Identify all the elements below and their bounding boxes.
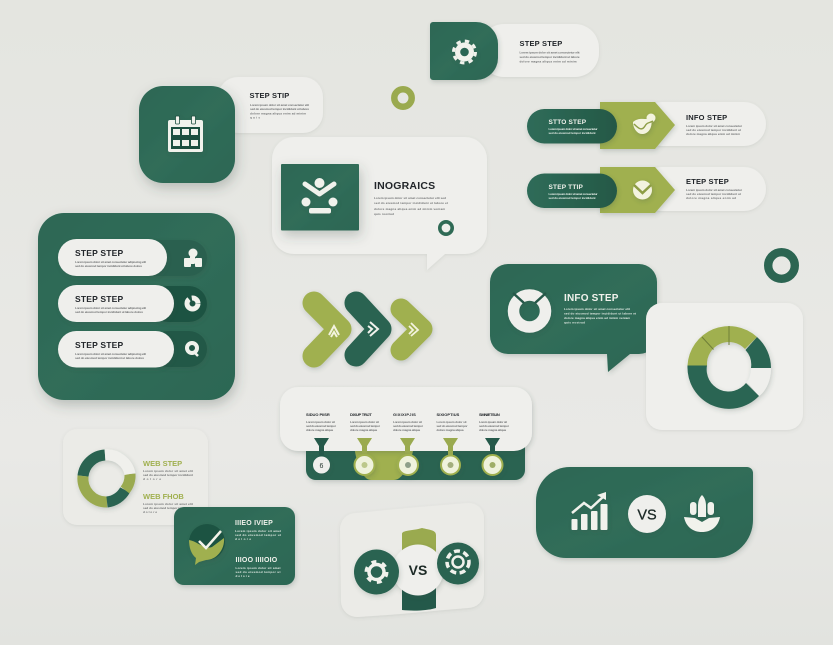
- calendar text card: [218, 77, 323, 133]
- column 5: dolore magna aliqua: [479, 428, 506, 432]
- column 2: Lorem ipsum dolor sit: [350, 420, 379, 424]
- panel: gear step: sed do eiusmod tempor incididunt ut labore: [520, 55, 580, 59]
- panel: arrow step row 1: [527, 102, 766, 149]
- panel: small donut card: dolore: [143, 477, 161, 481]
- list row 3: [58, 331, 207, 368]
- body text: sed do eiusmod tempor incididunt ut labore et: [374, 201, 448, 205]
- list row 3: sed do eiusmod tempor incididunt ut labore dolore: [75, 356, 144, 360]
- panel: arrow step row 2: dolore magna aliqua enim ad: [686, 196, 736, 200]
- panel: arrow step row 1: Lorem ipsum dolor sit amet consectetur: [686, 124, 743, 128]
- calendar text card: Lorem ipsum dolor sit amet consectetur elit: [250, 103, 309, 107]
- icon: search: [187, 343, 198, 356]
- column 2: dolore magna aliqua: [350, 428, 377, 432]
- list row 1: [58, 239, 207, 276]
- panel: arrow step row 2: ETEP STEP: [686, 177, 729, 186]
- panel: arrow step row 2: sed do eiusmod tempor incididunt ut: [686, 192, 741, 196]
- column 1: 6: [320, 463, 324, 470]
- panel: small green card: IIIEO IVIEP: [235, 520, 273, 527]
- panel: small green card: Lorem ipsum dolor sit amet: [235, 529, 281, 533]
- panel: arrow step row 2: STEP TTIP: [548, 184, 584, 191]
- icon: pie: [187, 298, 198, 309]
- panel: speech card infographics: [272, 137, 487, 270]
- panel: small green card: sed do eiusmod tempor ut: [235, 533, 281, 537]
- calendar text card: dolore magna aliqua enim ad minim: [250, 112, 306, 116]
- heading: INOGRAICS: [374, 180, 435, 192]
- body text: [374, 196, 448, 216]
- calendar text card: quis: [250, 116, 260, 120]
- icon: growth chart: [572, 492, 608, 530]
- column 3: Lorem ipsum dolor sit: [393, 420, 422, 424]
- dark tab: [402, 585, 436, 611]
- panel: arrow step row 2: Lorem ipsum dolor sit amet consectetur: [548, 192, 598, 196]
- column 5: SMNIETSUN: [479, 412, 500, 417]
- panel: arrow step row 1: dolore magna aliqua enim ad minim: [686, 132, 740, 136]
- column 2: sed do eiusmod tempor: [350, 424, 381, 428]
- panel: small donut card: WEB FHOB: [143, 492, 184, 501]
- panel: five column timeline: [280, 387, 532, 480]
- body text: quis nostrud: [374, 212, 394, 216]
- chevron 3: [401, 309, 422, 350]
- panel: green speech bubble: Lorem ipsum dolor sit amet consectetur elit: [564, 307, 630, 311]
- panel: small donut card: [63, 429, 208, 525]
- VS badge: VS: [637, 508, 657, 524]
- panel: small donut card: dolore: [143, 510, 157, 514]
- column 2: DIXUP TRIJT: [350, 412, 372, 417]
- icon: ring segments: [513, 293, 546, 327]
- panel: green speech bubble: dolore magna aliqua enim ad minim veniam: [564, 316, 630, 320]
- panel: arrow step row 1: sed do eiusmod tempor incididunt ut: [686, 128, 741, 132]
- panel: gear step: [430, 22, 599, 80]
- calendar text card: STEP STIP: [250, 91, 290, 100]
- list row 3: STEP STEP: [75, 340, 124, 350]
- panel: small donut card: sed do eiusmod tempor incididunt: [143, 506, 193, 510]
- column 1: SIDUO PIISR: [306, 412, 330, 417]
- chevron 2: [356, 303, 380, 355]
- panel: small green card: IIIOO IIIIOIO: [236, 557, 278, 564]
- body text: Lorem ipsum dolor sit amet consectetur elit sed: [374, 196, 446, 200]
- column 5: Lorem ipsum dolor sit: [479, 420, 507, 424]
- column 3: [393, 412, 424, 475]
- column 3: dolore magna aliqua: [393, 428, 420, 432]
- body text: dolore magna aliqua enim ad minim veniam: [374, 207, 445, 211]
- panel: small donut card: sed do eiusmod tempor incididunt: [143, 473, 193, 477]
- panel: calendar step: [139, 77, 323, 183]
- column 4: Lorem ipsum dolor sit: [436, 420, 466, 424]
- icon: leaf: [633, 114, 656, 134]
- timeline card: [280, 387, 532, 451]
- icon: people node: [184, 248, 202, 267]
- panel: arrow step row 1: Lorem ipsum dolor sit amet consectetur: [548, 127, 598, 131]
- icon: speech check: [189, 524, 225, 565]
- flower circle: [437, 542, 479, 584]
- panel: VS pill: [536, 467, 753, 558]
- icon: gear: [454, 41, 476, 63]
- panel: arrow step row 1: INFO STEP: [686, 113, 727, 122]
- panel: green speech bubble: INFO STEP: [564, 293, 619, 304]
- calendar text card: sed do eiusmod tempor incididunt ut labore: [250, 107, 309, 111]
- list row 2: sed do eiusmod tempor incididunt ut labore dolore: [75, 310, 143, 314]
- panel: VS comparison card: [340, 503, 484, 617]
- chevron 1: [314, 303, 340, 356]
- column 4: SIXIOPTIUS: [436, 412, 460, 417]
- panel: small green card: dolore: [235, 537, 251, 541]
- icon: check shield: [633, 180, 652, 200]
- panel: arrow step row 2: Lorem ipsum dolor sit amet consectetur: [686, 188, 743, 192]
- panel: arrow step row 1: sed do eiusmod tempor incididunt: [548, 131, 596, 135]
- list row 3: Lorem ipsum dolor sit amet consectetur adipiscing elit: [75, 352, 146, 356]
- gear circle: [354, 550, 399, 594]
- ring: large dark: [768, 252, 795, 279]
- list row 1: Lorem ipsum dolor sit amet consectetur adipiscing elit: [75, 260, 146, 264]
- green icon square: [281, 164, 359, 230]
- VS circle: VS: [409, 562, 427, 578]
- column 1: dolore magna aliqua: [306, 428, 333, 432]
- panel: small green card: Lorem ipsum dolor sit amet: [236, 566, 280, 570]
- column 4: sed do eiusmod tempor: [436, 424, 468, 428]
- calendar tile: [139, 86, 235, 183]
- panel: donut chart card: [646, 303, 803, 430]
- panel: small donut card: Lorem ipsum dolor sit amet elit: [143, 469, 193, 473]
- ring: olive: [394, 89, 412, 107]
- donut chart: [687, 326, 771, 409]
- column 1: [306, 412, 337, 474]
- panel: three step list: [38, 213, 235, 400]
- panel: small donut card: Lorem ipsum dolor sit amet elit: [143, 502, 193, 506]
- icon: lotus: [684, 495, 720, 532]
- icon: people: [302, 178, 338, 214]
- column 1: sed do eiusmod tempor: [306, 424, 337, 428]
- panel: green speech bubble: sed do eiusmod tempor incididunt ut labore et: [564, 312, 636, 316]
- column 4: [436, 412, 468, 474]
- list row 1: STEP STEP: [75, 248, 124, 258]
- panel: small donut card: WEB STEP: [143, 459, 182, 468]
- small donut: [83, 455, 130, 502]
- column 5: [479, 412, 510, 475]
- column 5: sed do eiusmod tempor: [479, 424, 510, 428]
- panel: gear step: dolore magna aliqua enim ad minim: [520, 60, 577, 64]
- panel: gear step: STEP STEP: [520, 39, 562, 48]
- panel: small green card: dolore: [236, 574, 250, 578]
- list row 2: Lorem ipsum dolor sit amet consectetur adipiscing elit: [75, 306, 146, 310]
- list row 2: STEP STEP: [75, 294, 124, 304]
- panel: small green card: [174, 507, 295, 585]
- panel: green speech bubble: quis nostrud: [564, 320, 585, 324]
- ring: small dark: [440, 222, 452, 234]
- icon: calendar: [168, 116, 203, 152]
- column 3: sed do eiusmod tempor: [393, 424, 424, 428]
- column 2: [350, 412, 381, 475]
- list row 1: sed do eiusmod tempor incididunt ut labore dolore: [75, 264, 142, 268]
- chevron arrows: [314, 303, 422, 356]
- VS badge: [628, 495, 666, 533]
- panel: small green card: sed do eiusmod tempor ut: [236, 570, 280, 574]
- timeline band: [306, 445, 525, 480]
- olive tab: [402, 528, 436, 552]
- column 3: GIXIXIPJIS: [393, 412, 416, 417]
- VS circle: [392, 544, 444, 596]
- list row 2: [58, 285, 207, 322]
- panel: arrow step row 2: [527, 167, 766, 213]
- panel: arrow step row 1: STTO STEP: [548, 119, 587, 126]
- panel: gear step: Lorem ipsum dolor sit amet consectetur elit: [520, 50, 580, 54]
- column 1: Lorem ipsum dolor sit: [306, 420, 335, 424]
- panel: arrow step row 2: sed do eiusmod tempor incididunt: [548, 196, 596, 200]
- panel: green speech bubble: [490, 264, 657, 372]
- column 4: dolore magna aliqua: [436, 428, 464, 432]
